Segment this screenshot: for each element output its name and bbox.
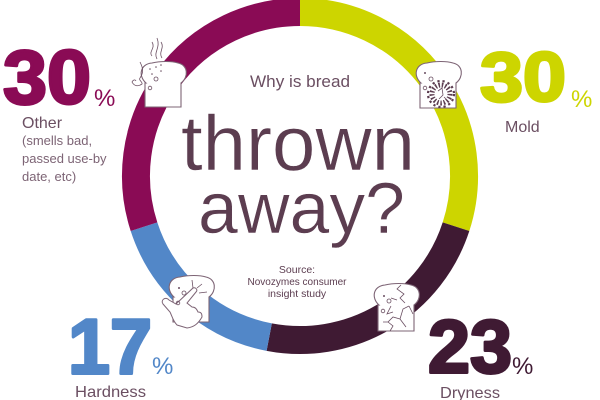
source note: Source:: [279, 264, 315, 276]
donut ring chart: [136, 12, 464, 340]
stat: other: date, etc): [22, 169, 76, 184]
headline: thrown: [181, 99, 415, 187]
stat: other: Other: [22, 115, 63, 132]
stat: other: [3, 36, 115, 184]
icon: smelly bread: [132, 38, 186, 107]
intro text: Why is bread: [250, 72, 350, 91]
ring segment: hardness 17%: [144, 227, 269, 337]
icon: moldy bread: [416, 62, 461, 108]
icon: dry cracked bread: [374, 284, 419, 331]
source note: Novozymes consumer: [248, 276, 347, 288]
ring segment: dryness 23%: [269, 227, 456, 340]
stat: other: passed use-by: [22, 151, 107, 166]
stat: dryness: 23: [428, 304, 512, 388]
stat: mold: Mold: [505, 119, 540, 136]
headline: away?: [198, 169, 405, 249]
stat: mold: [480, 38, 592, 136]
stat: dryness: [428, 304, 533, 400]
stat: hardness: 17: [68, 302, 152, 390]
source note: [248, 264, 347, 300]
stat: mold: 30: [480, 38, 566, 116]
stat: hardness: %: [152, 353, 173, 380]
stat: other: %: [94, 85, 115, 112]
stat: other: (smells bad,: [22, 133, 92, 148]
stat: other: 30: [3, 36, 91, 120]
stat: mold: %: [571, 86, 592, 113]
icon: hard bread with finger: [162, 276, 214, 328]
stat: dryness: %: [512, 353, 533, 380]
headline: [181, 99, 415, 249]
ring segment: mold 30%: [300, 12, 464, 227]
ring segment: other 30%: [136, 12, 300, 227]
source note: insight study: [268, 288, 327, 300]
